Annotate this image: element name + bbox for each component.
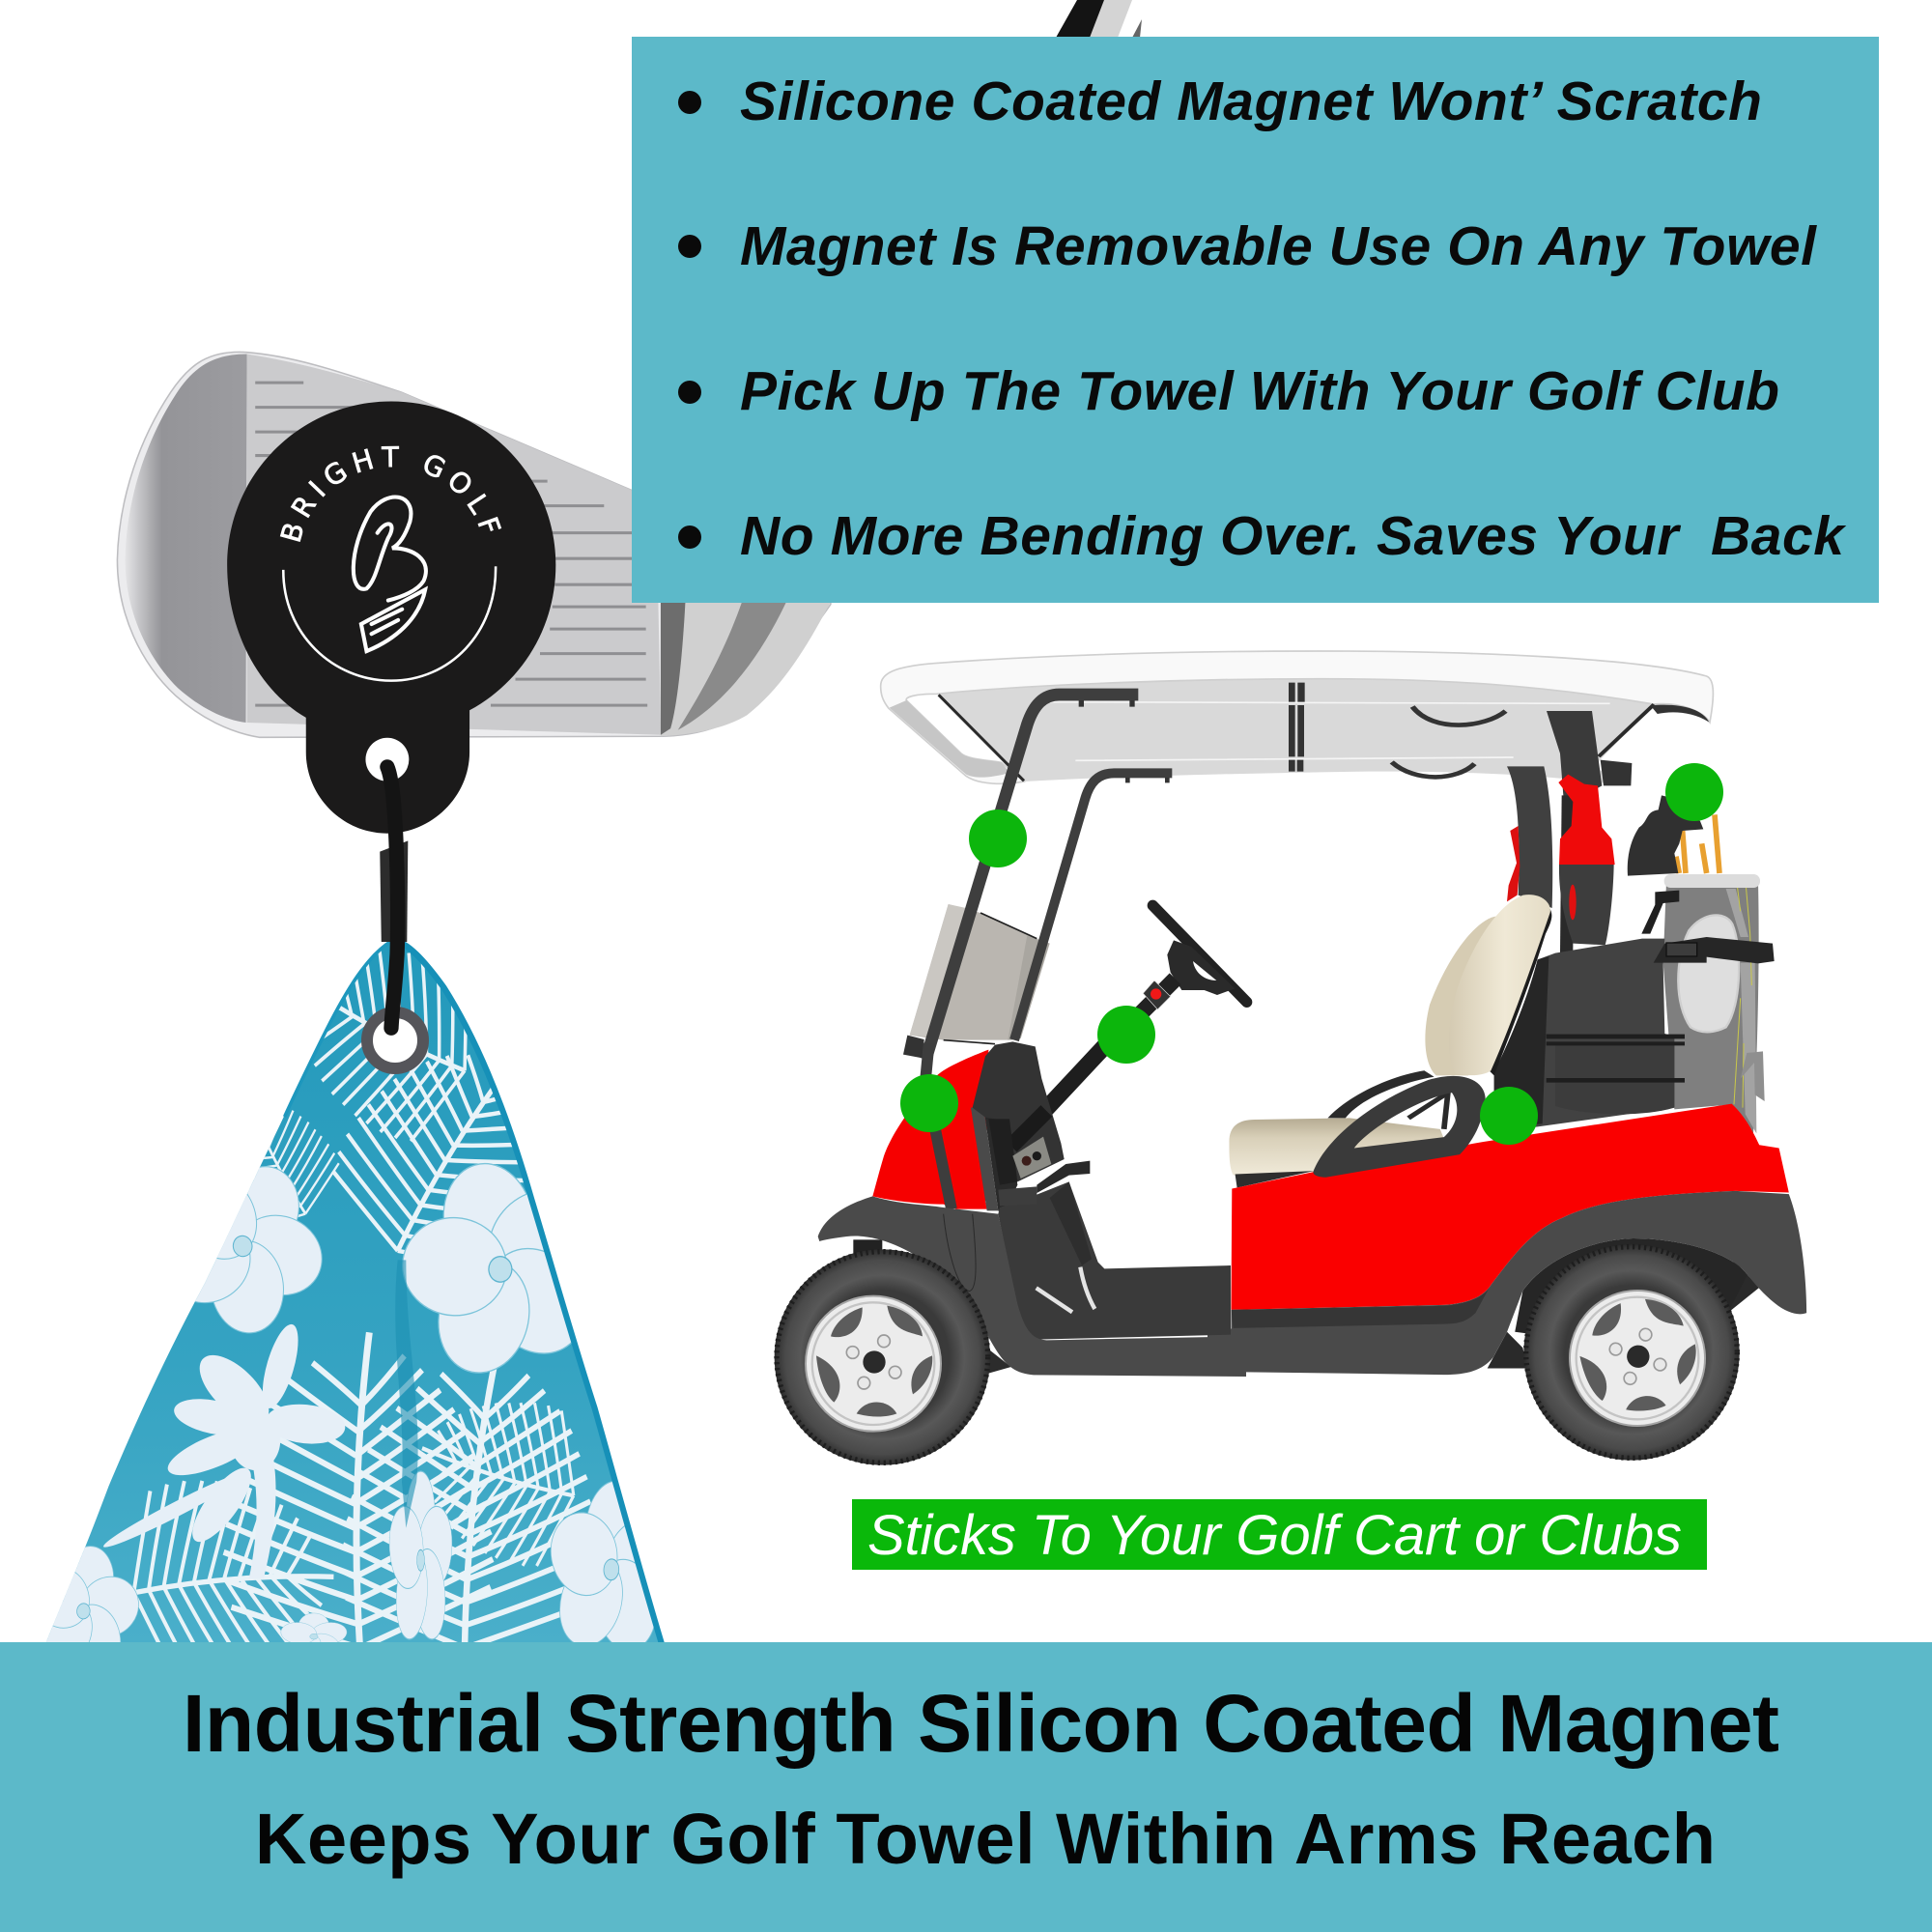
steering column front [1011, 1111, 1046, 1147]
canopy rim [881, 651, 1713, 783]
inner pillar [1014, 773, 1172, 1040]
dot: nose [900, 1074, 958, 1132]
pillar clips [1079, 700, 1170, 782]
upper rear pillar [1547, 711, 1602, 802]
fender oval panel [944, 1214, 976, 1292]
carabiner and grommet [367, 767, 423, 1068]
magnet tag [227, 402, 556, 834]
rear of cart: pillars, blower, bag, storage, seat back [1425, 711, 1775, 1133]
canopy strut [939, 695, 1024, 781]
golf club head [117, 352, 831, 737]
bullet 1: Silicone Coated Magnet Wont’ Scratch [740, 71, 1762, 132]
silicone tag body [227, 401, 555, 834]
front post [925, 1043, 952, 1209]
floor and kick panel [998, 1181, 1231, 1340]
front of cart [775, 1041, 1246, 1465]
headline: Industrial Strength Silicon Coated Magnet [183, 1678, 1779, 1769]
roof handles and rear strut [1392, 704, 1709, 777]
panel background [632, 37, 1879, 603]
red rear body [1231, 1104, 1789, 1310]
red blower [1558, 775, 1615, 865]
wheel well [1515, 1238, 1747, 1348]
magnet contact points [900, 763, 1723, 1145]
canopy centre lines [1043, 702, 1610, 760]
windshield [910, 904, 1050, 1044]
nose divider post [971, 1108, 998, 1210]
roof arm [1601, 760, 1632, 785]
lower ring [283, 566, 496, 681]
wheel arch shadow [853, 1239, 882, 1256]
dot: steering column [1097, 1006, 1155, 1064]
body trim [1231, 1288, 1490, 1328]
subhead: Keeps Your Golf Towel Within Arms Reach [255, 1799, 1716, 1879]
golf bag [1641, 874, 1765, 1133]
golf clubs [1628, 795, 1719, 876]
dash box [988, 1119, 1017, 1185]
rear fender and sill [1208, 1191, 1806, 1375]
red nose [872, 1050, 988, 1209]
fronds [313, 951, 468, 1142]
dot: seat side [1480, 1087, 1538, 1145]
dot: clubs [1665, 763, 1723, 821]
dot: windshield pillar [969, 810, 1027, 867]
canopy underside [937, 679, 1654, 786]
bullet 2: Magnet Is Removable Use On Any Towel [740, 215, 1817, 277]
rear armrest [1327, 1070, 1435, 1118]
green caption: Sticks To Your Golf Cart or Clubs [867, 1504, 1682, 1567]
canopy centre straps [1289, 683, 1305, 772]
storage body [1494, 939, 1674, 1127]
armrest [1313, 1076, 1486, 1178]
seat cushion [1229, 1118, 1444, 1175]
front pillar [925, 695, 1138, 1060]
cooler [1547, 1035, 1685, 1114]
kick panel lower [1050, 1181, 1092, 1265]
seat back cushion [1449, 895, 1550, 1075]
club grooves [255, 383, 647, 705]
panel: bottom banner [0, 1642, 1932, 1932]
dark holder [1559, 865, 1614, 945]
bullet 4: No More Bending Over. Saves Your Back [740, 505, 1847, 567]
towel fold shading [395, 1260, 418, 1528]
under-body behind wheel [988, 1350, 1011, 1374]
palm tree [100, 1320, 347, 1578]
golf cart [775, 651, 1806, 1465]
dashboard [973, 1041, 1065, 1181]
cart canopy and roof frame [881, 651, 1713, 1060]
club toe and sole [117, 352, 831, 737]
lower rear pillar [1507, 766, 1552, 908]
club striking face [247, 355, 661, 735]
cup holder [998, 1161, 1090, 1206]
brand name: BRIGHT GOLF [280, 446, 502, 542]
steering wheel [1133, 905, 1247, 1021]
canopy front gray strip [890, 700, 1009, 778]
steering column [1011, 1046, 1104, 1147]
script B logo [354, 497, 426, 651]
flowers [402, 1163, 572, 1374]
golf club shaft [1056, 0, 1142, 38]
grommet [367, 1012, 423, 1068]
seat back rear layer [1425, 916, 1497, 1075]
rear wheel [1523, 1244, 1740, 1461]
carabiner [380, 767, 408, 1028]
club hosel [661, 602, 831, 736]
towel [46, 942, 665, 1642]
towel print [13, 914, 688, 1698]
front fender and sill [818, 1196, 1246, 1377]
control plate [1012, 1137, 1051, 1179]
panel: feature list [632, 37, 1879, 603]
towel left hem [285, 941, 391, 1117]
pedals [1037, 1267, 1094, 1312]
body shadow [1494, 956, 1548, 1127]
seat back shadow edge [1490, 908, 1551, 1075]
dash side fill [983, 1108, 1017, 1215]
seat base [1236, 1171, 1314, 1188]
club left panel [126, 355, 247, 723]
strap buckle [1666, 943, 1697, 956]
front wheel [775, 1249, 990, 1465]
blower slit [1569, 885, 1577, 920]
rear body, armrest and rear wheel [1208, 1070, 1806, 1375]
bag strap [1654, 937, 1775, 963]
dark strip behind blower [1560, 795, 1574, 953]
towel hem [391, 941, 662, 1643]
small red handle [1507, 826, 1520, 901]
towel fabric [45, 941, 662, 1643]
tag hole [365, 738, 409, 781]
brand arc [299, 467, 484, 544]
bullet 3: Pick Up The Towel With Your Golf Club [740, 360, 1779, 422]
windshield base bar [903, 1036, 924, 1058]
armrest supports [1408, 1093, 1448, 1129]
under-body behind wheel [1488, 1263, 1759, 1369]
